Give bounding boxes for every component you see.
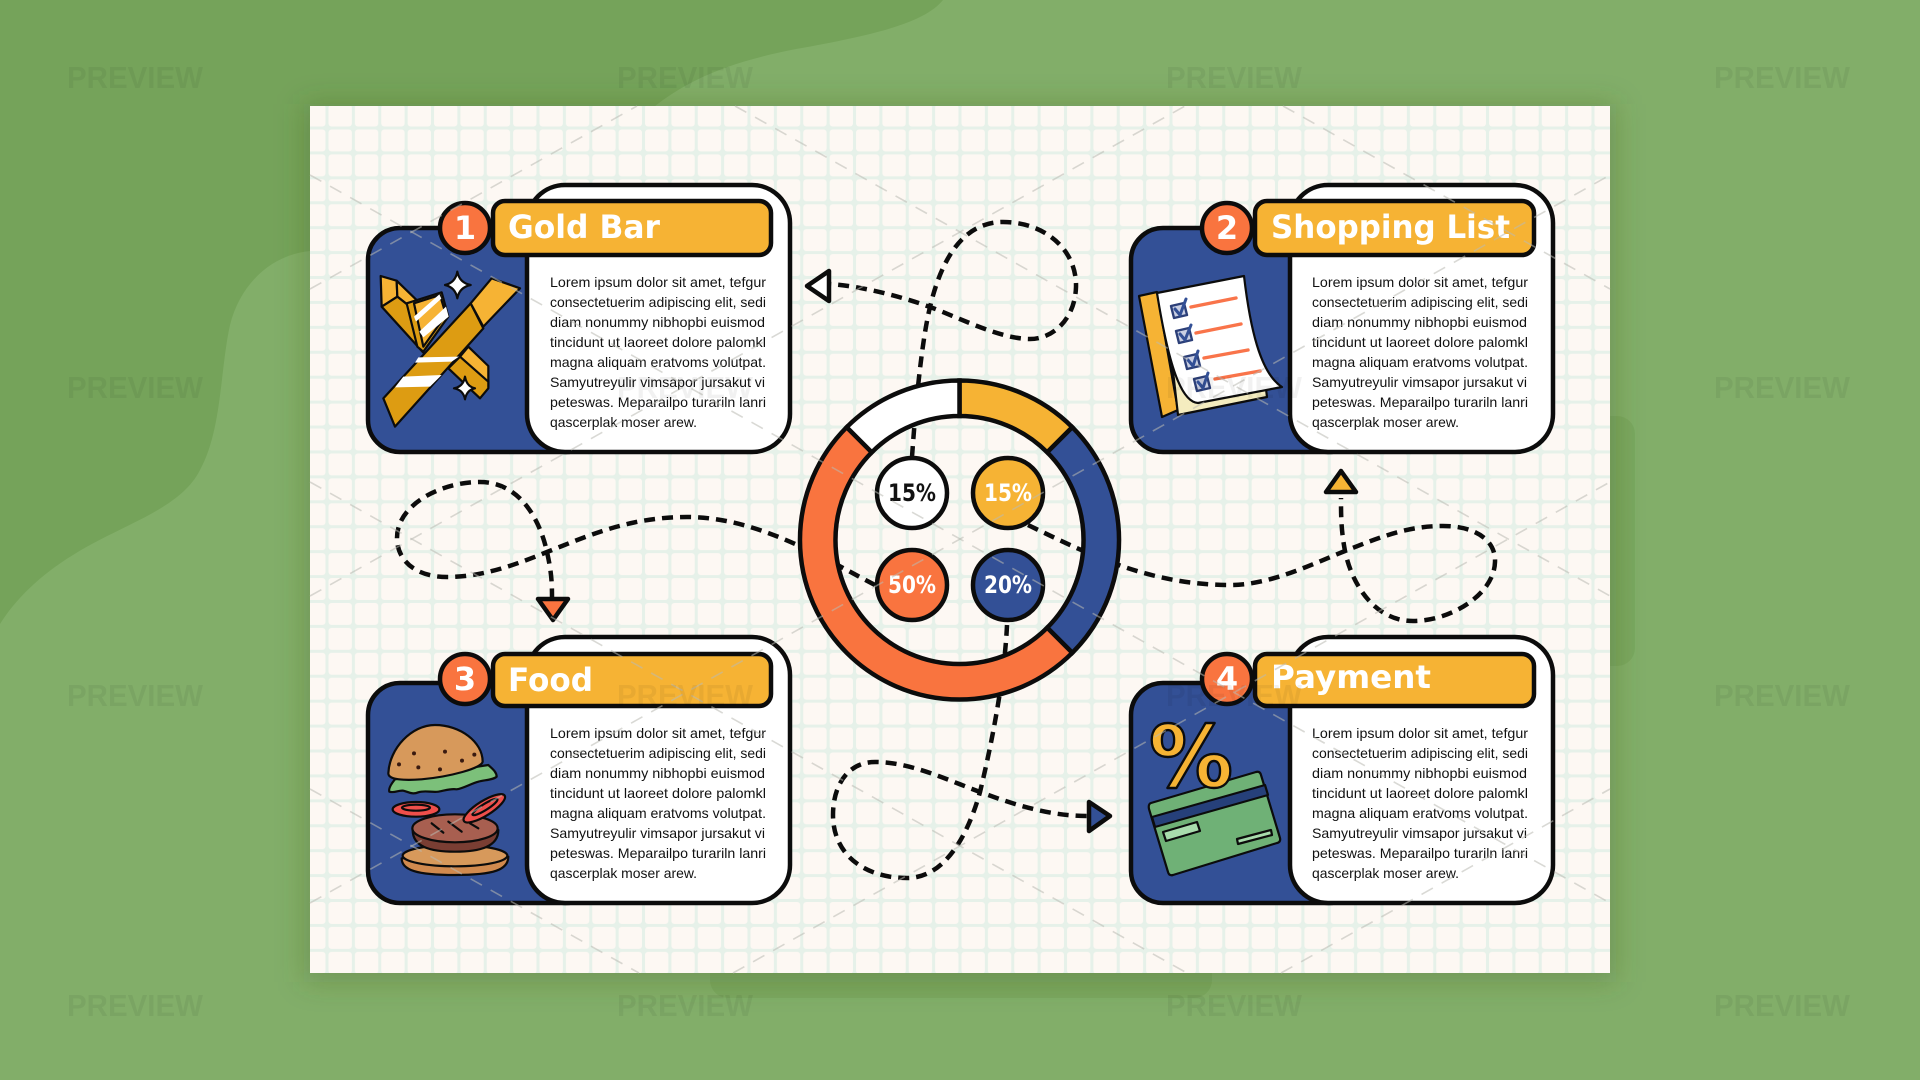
- background block: bottom tab: [710, 940, 1212, 998]
- icon detail: check boxes: [1171, 303, 1210, 391]
- watermark: PREVIEW grid: PREVIEW: [1166, 60, 1303, 95]
- text block: Payment: qascerplak moser arew.: [1312, 866, 1459, 881]
- panel: Food: [368, 637, 790, 903]
- text block: Payment: consectetuerim adipiscing elit, sedi: [1312, 746, 1528, 761]
- text block: Gold Bar: tincidunt ut laoreet dolore palomkl: [550, 335, 766, 350]
- poster paper with grid: [310, 106, 1610, 973]
- dashed route: top loop to card 1: [830, 222, 1076, 457]
- badge: 3: 3: [454, 660, 476, 698]
- panel: Gold Bar: [368, 185, 790, 452]
- watermark: PREVIEW grid: PREVIEW: [617, 60, 754, 95]
- icon: credit card and percent: [1149, 708, 1280, 875]
- icon detail: tomato slice left: [393, 802, 439, 817]
- arrow: left white: [807, 271, 829, 301]
- text block: Shopping List: tincidunt ut laoreet dolore palomkl: [1312, 335, 1528, 350]
- text block: Food: consectetuerim adipiscing elit, sedi: [550, 746, 766, 761]
- segment: white 15%: [847, 380, 960, 452]
- text block: Food: magna aliquam eratvoms volutpat.: [550, 806, 766, 821]
- watermark: PREVIEW grid: PREVIEW: [1714, 988, 1851, 1023]
- text block: Payment: Samyutreyulir vimsapor jursakut vi: [1312, 826, 1527, 841]
- arrow: up yellow: [1326, 471, 1356, 492]
- watermark: PREVIEW grid: PREVIEW: [617, 678, 754, 713]
- background block: right tab: [1580, 416, 1635, 666]
- text block: Gold Bar: Samyutreyulir vimsapor jursakut vi: [550, 375, 765, 390]
- dashed route: left loop to card 3: [397, 482, 875, 597]
- segment: orange 50%: [800, 427, 1072, 700]
- text block: Gold Bar: diam nonummy nibhopbi euismod: [550, 315, 765, 330]
- text block: Payment: peteswas. Meparailpo turariln lanri: [1312, 846, 1528, 861]
- badge: 1: 1: [454, 209, 476, 247]
- badge: 2: [1202, 203, 1252, 253]
- watermark: PREVIEW grid: PREVIEW: [67, 678, 204, 713]
- text block: Gold Bar: qascerplak moser arew.: [550, 415, 697, 430]
- text block: Shopping List: Samyutreyulir vimsapor jursakut vi: [1312, 375, 1527, 390]
- watermark: PREVIEW grid: PREVIEW: [67, 60, 204, 95]
- watermark: PREVIEW grid: PREVIEW: [1714, 370, 1851, 405]
- icon detail: top bun: [388, 725, 483, 780]
- text block: Shopping List: [1312, 275, 1528, 430]
- donut chart: [800, 380, 1119, 700]
- heading bar: Payment: [1255, 654, 1534, 706]
- text block: Gold Bar: [550, 275, 766, 430]
- text block: Food: Samyutreyulir vimsapor jursakut vi: [550, 826, 765, 841]
- text block: Gold Bar: peteswas. Meparailpo turariln lanri: [550, 395, 766, 410]
- text block: Food: [550, 726, 766, 881]
- panel: Shopping List: [1131, 185, 1553, 452]
- watermark: PREVIEW grid: PREVIEW: [617, 370, 754, 405]
- background blob: dark green top-left: [0, 0, 943, 624]
- text block: Payment: tincidunt ut laoreet dolore palomkl: [1312, 786, 1528, 801]
- heading bar: Shopping List: Shopping List: [1271, 208, 1510, 246]
- stat: yellow 15%: [973, 458, 1043, 528]
- badge: 4: [1202, 654, 1252, 704]
- arrow: down orange: [538, 599, 568, 620]
- text block: Gold Bar: Lorem ipsum dolor sit amet, tefgur: [550, 275, 766, 290]
- heading bar: Payment: Payment: [1271, 658, 1431, 696]
- text block: Gold Bar: consectetuerim adipiscing elit, sedi: [550, 295, 766, 310]
- stat: blue 20%: 20%: [984, 571, 1032, 599]
- text block: Payment: diam nonummy nibhopbi euismod: [1312, 766, 1527, 781]
- icon: checklist notepad: [1139, 276, 1282, 417]
- text block: Shopping List: magna aliquam eratvoms volutpat.: [1312, 355, 1528, 370]
- text block: Shopping List: peteswas. Meparailpo turariln lanri: [1312, 395, 1528, 410]
- watermark: PREVIEW grid: PREVIEW: [1166, 678, 1303, 713]
- dashed route: right loop to card 2: [1028, 498, 1495, 621]
- icon detail: bottom bun: [402, 845, 508, 875]
- heading bar: Food: [493, 654, 771, 706]
- heading bar: Food: Food: [508, 661, 593, 699]
- text block: Shopping List: consectetuerim adipiscing elit, sedi: [1312, 295, 1528, 310]
- heading bar: Gold Bar: Gold Bar: [508, 208, 660, 246]
- stat: white 15%: [877, 458, 947, 528]
- text block: Shopping List: diam nonummy nibhopbi euismod: [1312, 315, 1527, 330]
- watermark: PREVIEW grid: PREVIEW: [1166, 370, 1303, 405]
- icon detail: patty: [412, 814, 498, 852]
- stat: blue 20%: [973, 550, 1043, 620]
- icon detail: sparkle large: [445, 272, 471, 298]
- text block: Food: peteswas. Meparailpo turariln lanri: [550, 846, 766, 861]
- badge: 2: 2: [1216, 209, 1238, 247]
- watermark: PREVIEW grid: PREVIEW: [1714, 678, 1851, 713]
- heading bar: Shopping List: [1255, 201, 1534, 255]
- text block: Payment: Lorem ipsum dolor sit amet, tefgur: [1312, 726, 1528, 741]
- icon detail: list lines: [1191, 298, 1260, 379]
- icon detail: sparkle small: [454, 377, 475, 399]
- text block: Food: diam nonummy nibhopbi euismod: [550, 766, 765, 781]
- watermark: PREVIEW grid: PREVIEW: [1714, 60, 1851, 95]
- badge: 4: 4: [1216, 660, 1238, 698]
- badge: 3: [440, 654, 490, 704]
- poster shadow: [304, 104, 1616, 982]
- icon detail: percent sign: %: [1149, 708, 1233, 808]
- watermark: PREVIEW grid: PREVIEW: [67, 988, 204, 1023]
- watermark: PREVIEW grid: PREVIEW: [67, 370, 204, 405]
- text block: Shopping List: qascerplak moser arew.: [1312, 415, 1459, 430]
- text block: Payment: [1312, 726, 1528, 881]
- text block: Food: tincidunt ut laoreet dolore palomkl: [550, 786, 766, 801]
- stat: orange 50%: 50%: [888, 571, 936, 599]
- text block: Payment: magna aliquam eratvoms volutpat.: [1312, 806, 1528, 821]
- icon: crossed gold bars: [381, 272, 520, 427]
- dashed route: bottom loop to card 4: [833, 625, 1087, 878]
- icon detail: lettuce: [389, 765, 497, 793]
- panel: Payment: [1131, 637, 1553, 903]
- icon: burger: [388, 725, 509, 875]
- stat: yellow 15%: 15%: [984, 479, 1032, 507]
- arrow: right blue: [1089, 802, 1110, 831]
- stat: white 15%: 15%: [888, 479, 936, 507]
- text block: Gold Bar: magna aliquam eratvoms volutpat.: [550, 355, 766, 370]
- watermark: PREVIEW grid: PREVIEW: [617, 988, 754, 1023]
- heading bar: Gold Bar: [493, 201, 771, 255]
- segment: blue 20%: [1047, 427, 1119, 653]
- badge: 1: [440, 203, 490, 253]
- text block: Food: qascerplak moser arew.: [550, 866, 697, 881]
- stat: orange 50%: [877, 550, 947, 620]
- text block: Shopping List: Lorem ipsum dolor sit amet, tefgur: [1312, 275, 1528, 290]
- icon detail: tomato slice right: [460, 789, 509, 827]
- watermark: PREVIEW grid: PREVIEW: [1166, 988, 1303, 1023]
- segment: yellow 15%: [960, 380, 1072, 452]
- text block: Food: Lorem ipsum dolor sit amet, tefgur: [550, 726, 766, 741]
